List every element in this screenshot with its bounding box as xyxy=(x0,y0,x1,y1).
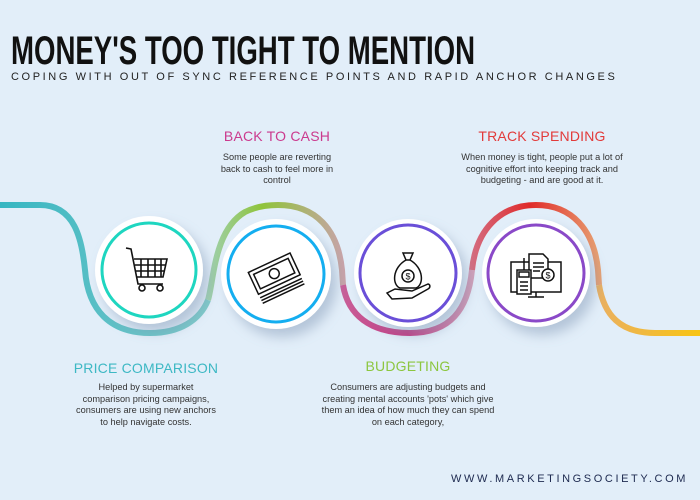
icon: billing screen xyxy=(511,254,561,297)
text: back to cash: back to cash to feel more in xyxy=(221,164,333,174)
text: budgeting xyxy=(322,382,494,427)
heading: back to cash: BACK TO CASH xyxy=(224,128,330,144)
heading: price comparison: PRICE COMPARISON xyxy=(74,360,218,376)
circle: back to cash xyxy=(221,219,331,329)
circle: budgeting xyxy=(354,219,462,327)
heading: budgeting: BUDGETING xyxy=(365,358,451,374)
heading: track spending: TRACK SPENDING xyxy=(478,128,606,144)
text: track spending xyxy=(461,152,623,185)
text: back to cash xyxy=(221,152,333,185)
text: price comparison xyxy=(76,382,216,427)
text: track spending: When money is tight, people put a lot of xyxy=(461,152,623,162)
text: price comparison: to help navigate costs. xyxy=(100,416,192,426)
text: budgeting: Consumers are adjusting budgets and xyxy=(330,382,486,392)
footer url: WWW.MARKETINGSOCIETY.COM xyxy=(451,473,688,485)
text: track spending: cognitive effort into keeping track and xyxy=(466,164,618,174)
icon: money bag in hand: $ xyxy=(405,272,411,282)
circle: price comparison xyxy=(95,216,203,324)
title: MONEY'S TOO TIGHT TO MENTION xyxy=(11,29,475,73)
text: price comparison: Helped by supermarket xyxy=(98,382,193,392)
text: price comparison: consumers are using new anchors xyxy=(76,405,216,415)
icon: money bag in hand xyxy=(387,253,430,299)
circle: track spending xyxy=(482,219,590,327)
text: back to cash: Some people are reverting xyxy=(223,152,331,162)
text: budgeting: on each category, xyxy=(372,416,444,426)
subtitle: COPING WITH OUT OF SYNC REFERENCE POINTS AND RAPID ANCHOR CHANGES xyxy=(11,71,617,83)
text: track spending: budgeting - and are good at it. xyxy=(481,175,603,185)
text: budgeting: them an idea of how much they can spend xyxy=(322,405,494,415)
text: back to cash: control xyxy=(263,175,291,185)
text: budgeting: creating mental accounts 'pots' which give xyxy=(322,394,494,404)
text: price comparison: comparison pricing campaigns, xyxy=(83,394,209,404)
icon: cash stack xyxy=(248,253,304,303)
icon: cart xyxy=(126,248,167,291)
icon: billing screen: $ xyxy=(545,270,551,280)
